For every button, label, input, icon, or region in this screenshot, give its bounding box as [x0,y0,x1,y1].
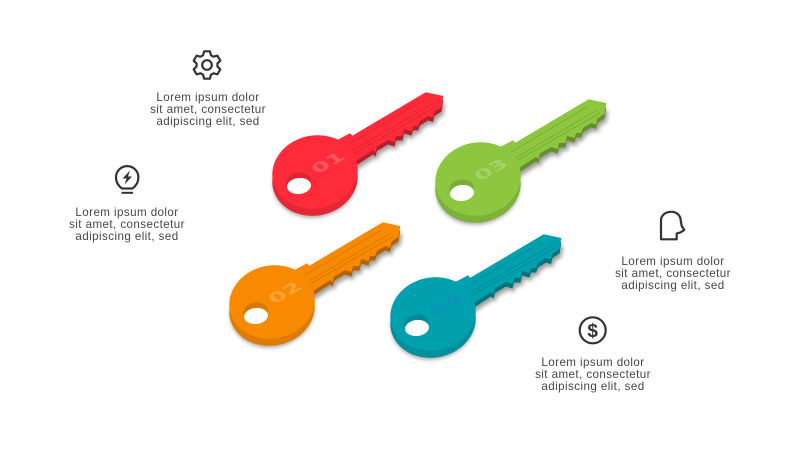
number 01: 01 [306,148,349,177]
number 04: 04 [424,290,467,319]
key 03: green [428,99,608,232]
icon: light bulb [116,166,138,193]
icon: gear [194,51,220,79]
text block: gear [150,91,266,128]
icon: head profile [661,212,684,239]
text block: head [615,255,731,292]
text block: gear: adipiscing elit, sed [156,115,260,128]
key 01: red [265,92,445,225]
text block: light bulb: Lorem ipsum dolor [75,206,179,219]
text block: head: sit amet, consectetur [615,267,731,280]
text block: head: adipiscing elit, sed [621,279,725,292]
text block: head: Lorem ipsum dolor [621,255,725,268]
key 04: teal [383,234,563,367]
text block: dollar: Lorem ipsum dolor [541,356,645,369]
icon: dollar [580,317,606,343]
text block: gear: sit amet, consectetur [150,103,266,116]
text block: dollar [535,356,651,393]
text block: light bulb [69,206,185,243]
icon: dollar: $ [587,321,598,342]
text block: dollar: adipiscing elit, sed [541,380,645,393]
number 03: 03 [469,155,512,184]
text block: dollar: sit amet, consectetur [535,368,651,381]
text block: light bulb: sit amet, consectetur [69,218,185,231]
key 02: orange [222,222,402,355]
text block: light bulb: adipiscing elit, sed [75,230,179,243]
number 02: 02 [263,278,306,307]
text block: gear: Lorem ipsum dolor [156,91,260,104]
